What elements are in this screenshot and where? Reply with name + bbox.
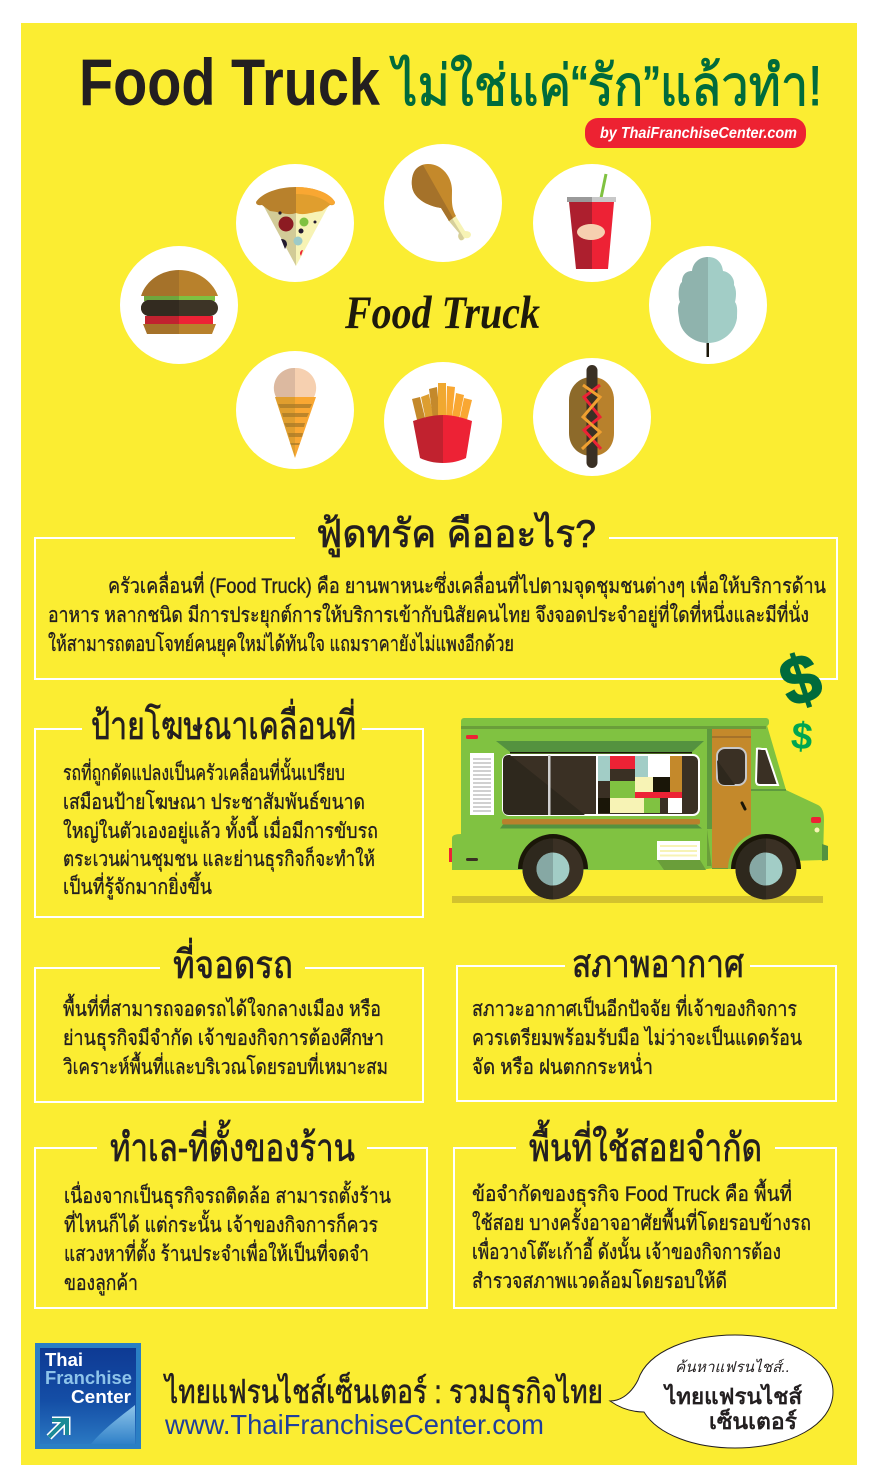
logo: Thai Franchise Center: Center — [71, 1387, 131, 1407]
icon: cotton candy — [649, 246, 767, 364]
text block: limited space — [472, 1179, 811, 1293]
icon: burger — [120, 246, 238, 364]
text block: location: แสวงหาที่ตั้ง ร้านประจำเพื่อให้เป็นที่จดจำ — [64, 1239, 369, 1266]
text block: parking: วิเคราะห์พื้นที่และบริเวณโดยรอบที่เหมาะสม — [63, 1052, 388, 1079]
text block: mobile advertising: ตระเวนผ่านชุมชน และย่านธุรกิจก็จะทำให้ — [63, 845, 375, 872]
text block: definition: ให้สามารถตอบโจทย์คนยุคใหม่ได้ทันใจ แถมราคายังไม่แพงอีกด้วย — [48, 632, 514, 657]
heading: mobile advertising: ป้ายโฆษณาเคลื่อนที่ — [91, 699, 356, 748]
icon: small dollar sign: $ — [789, 715, 814, 759]
icon: large dollar sign: $ — [771, 638, 830, 722]
text block: mobile advertising: เสมือนป้ายโฆษณา ประชาสัมพันธ์ขนาด — [63, 790, 365, 814]
icon: chicken leg — [384, 144, 502, 262]
text block: weather: จัด หรือ ฝนตกกระหน่ำ — [472, 1052, 653, 1079]
text block: location: ของลูกค้า — [64, 1272, 138, 1296]
heading: parking: ที่จอดรถ — [173, 938, 293, 987]
speech bubble: เซ็นเตอร์ — [709, 1407, 797, 1434]
title: ไม่ใช่แค่“รัก”แล้วทำ! — [390, 54, 822, 117]
text block: limited space: เพื่อวางโต๊ะเก้าอี้ ดังนั้น เจ้าของกิจการต้อง — [472, 1237, 781, 1264]
title — [79, 45, 822, 119]
byline badge — [585, 118, 806, 148]
speech bubble: ไทยแฟรนไชส์ — [663, 1383, 803, 1409]
text block: mobile advertising: ใหญ่ในตัวเองอยู่แล้ว ทั้งนี้ เมื่อมีการขับรถ — [63, 816, 378, 844]
speech bubble — [610, 1335, 833, 1448]
panel: mobile advertising — [35, 699, 423, 917]
text block: parking: ย่านธุรกิจมีจำกัด เจ้าของกิจการต้องศึกษา — [63, 1027, 384, 1051]
text block: parking — [63, 994, 388, 1079]
text block: limited space: ข้อจำกัดของธุรกิจ Food Truck คือ พื้นที่ — [472, 1179, 792, 1207]
text block: weather: สภาวะอากาศเป็นอีกปัจจัย ที่เจ้าของกิจการ — [472, 994, 797, 1021]
icon: hot dog — [533, 358, 651, 476]
text block: weather — [472, 994, 802, 1079]
logo: Thai Franchise Center — [35, 1343, 141, 1449]
food truck script heading: Food Truck — [344, 287, 540, 339]
speech bubble: ค้นหาแฟรนไชส์.. — [675, 1358, 790, 1376]
panel: location — [35, 1119, 427, 1308]
logo: Thai Franchise Center: Thai — [45, 1350, 83, 1370]
text block: location: เนื่องจากเป็นธุรกิจรถติดล้อ สามารถตั้งร้าน — [64, 1181, 391, 1209]
panel: parking — [35, 938, 423, 1102]
heading: weather: สภาพอากาศ — [572, 943, 744, 986]
text block: limited space: สำรวจสภาพแวดล้อมโดยรอบให้ดี — [472, 1269, 727, 1293]
panel: weather — [457, 943, 836, 1101]
heading: location: ทำเล-ที่ตั้งของร้าน — [110, 1119, 355, 1170]
heading: what is: ฟู้ดทรัค คืออะไร? — [316, 512, 596, 557]
icon: french fries — [384, 362, 502, 480]
heading: limited space: พื้นที่ใช้สอยจำกัด — [529, 1119, 762, 1170]
text block: mobile advertising: รถที่ถูกดัดแปลงเป็นครัวเคลื่อนที่นั้นเปรียบ — [63, 758, 345, 786]
byline badge: by ThaiFranchiseCenter.com — [600, 125, 797, 142]
icon: soft drink — [533, 164, 651, 282]
website url: www.ThaiFranchiseCenter.com — [164, 1409, 544, 1440]
icon: ice cream — [236, 351, 354, 469]
text block: parking: พื้นที่ที่สามารถจอดรถได้ใจกลางเมือง หรือ — [63, 994, 381, 1021]
illustration: food truck — [449, 718, 828, 903]
title: Food Truck — [79, 45, 380, 119]
panel: what is a food truck — [35, 512, 837, 679]
text block: mobile advertising: เป็นที่รู้จักมากยิ่งขึ้น — [63, 872, 212, 900]
text block: location: ที่ไหนก็ได้ แต่กระนั้น เจ้าของกิจการก็ควร — [64, 1210, 378, 1237]
tagline: ไทยแฟรนไชส์เซ็นเตอร์ : รวมธุรกิจไทย — [163, 1372, 603, 1412]
text block: limited space: ใช้สอย บางครั้งอาจอาศัยพื้นที่โดยรอบข้างรถ — [472, 1208, 811, 1235]
logo: Thai Franchise Center: Franchise — [45, 1368, 132, 1388]
text block: location — [64, 1181, 391, 1296]
icon: pizza — [236, 164, 354, 282]
text block: mobile advertising — [63, 758, 378, 900]
text block: definition — [48, 571, 826, 657]
text block: weather: ควรเตรียมพร้อมรับมือ ไม่ว่าจะเป็นแดดร้อน — [472, 1024, 802, 1050]
panel: limited space — [454, 1119, 836, 1308]
